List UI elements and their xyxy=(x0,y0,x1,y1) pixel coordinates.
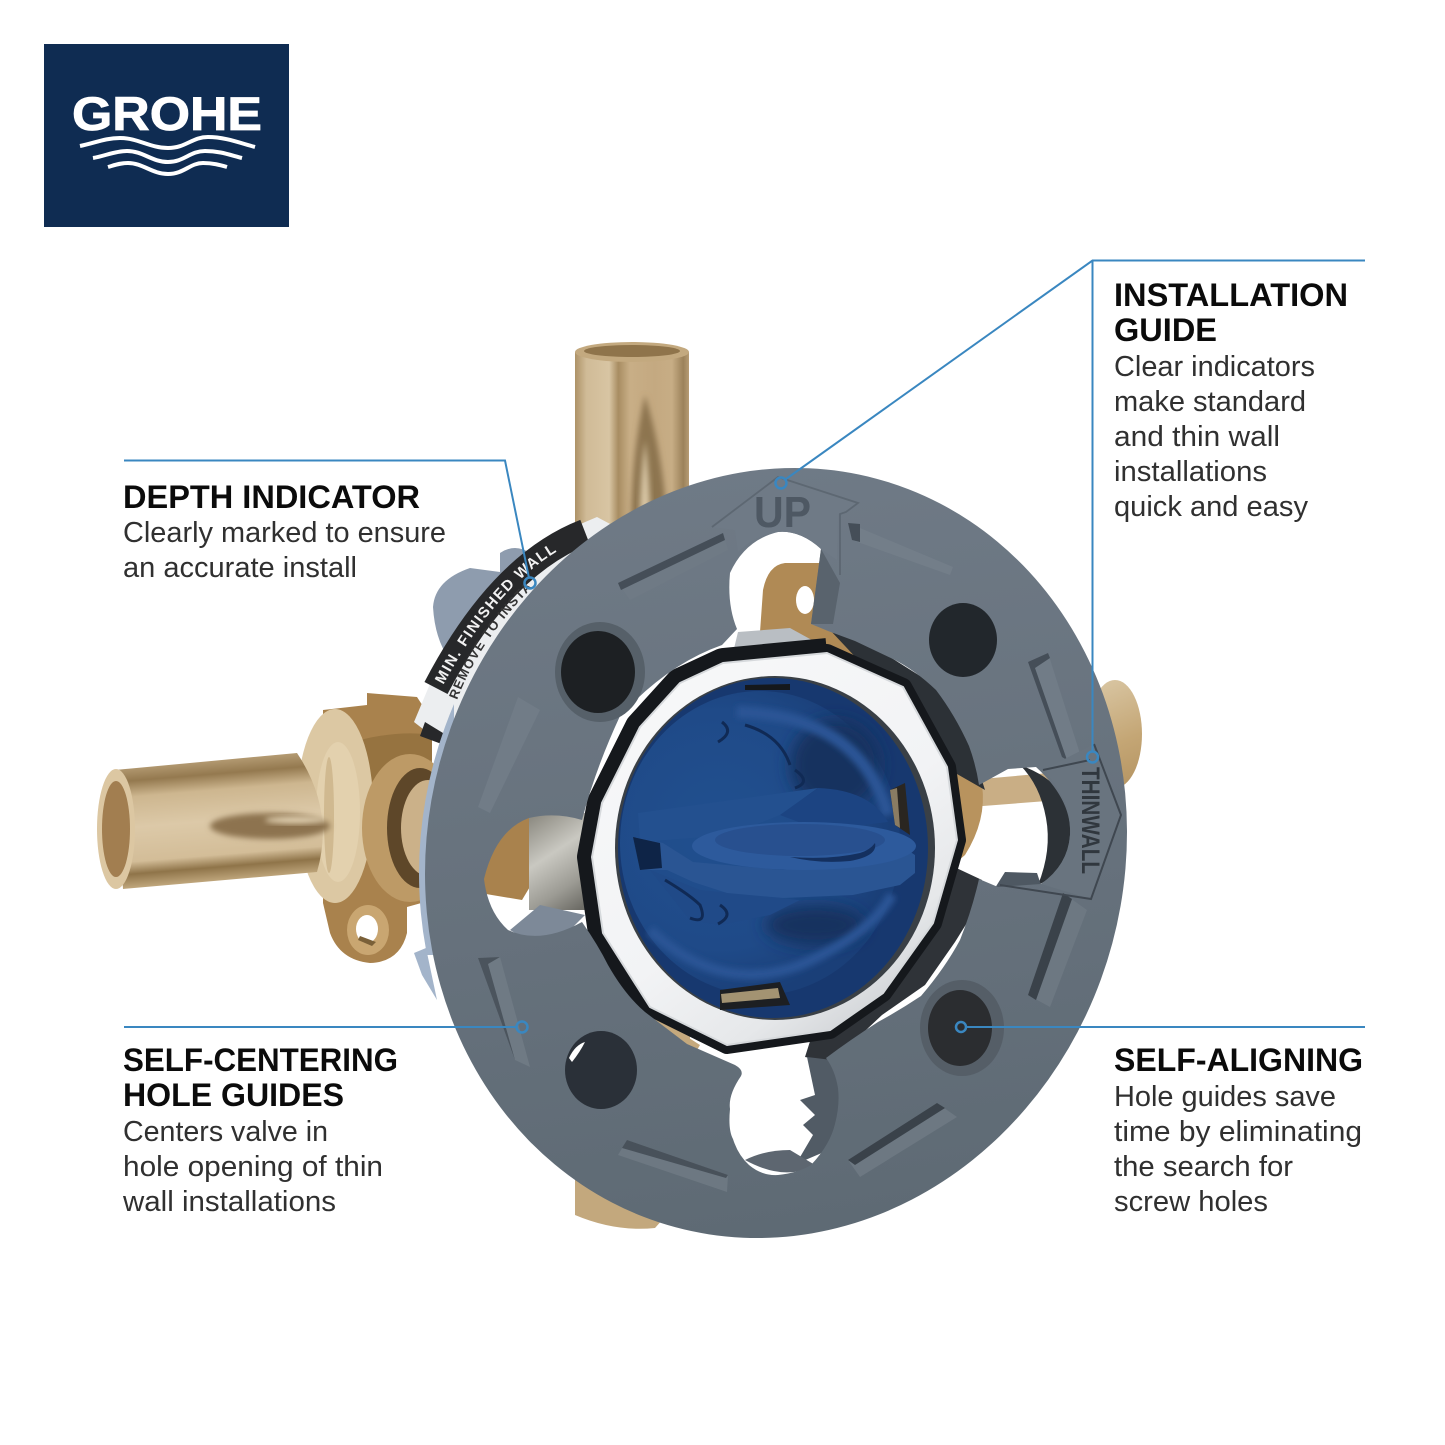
handle stem xyxy=(638,788,818,842)
dark wall upper right xyxy=(830,630,985,790)
text block: installation guide: Clear indicators xyxy=(1114,351,1315,383)
text block: self-aligning: SELF-ALIGNING xyxy=(1114,1042,1363,1078)
text block: self-centering hole guides: HOLE GUIDES xyxy=(123,1077,344,1113)
raised arc bars xyxy=(478,523,1087,1192)
text block: installation guide: GUIDE xyxy=(1114,312,1217,348)
text block: installation guide xyxy=(1114,277,1348,523)
text block: self-aligning: screw holes xyxy=(1114,1186,1268,1218)
hex nut xyxy=(362,754,458,902)
chrome ring xyxy=(592,653,957,1045)
top brass pipe xyxy=(575,342,689,572)
brass behind left hole xyxy=(472,810,540,900)
text block: self-centering hole guides: wall installations xyxy=(122,1186,336,1218)
text block: depth indicator: Clearly marked to ensure xyxy=(123,517,446,549)
dark gasket behind chrome xyxy=(592,653,957,1045)
left brass pipe and body xyxy=(97,693,458,963)
logo: GROHE: GROHE xyxy=(72,87,262,140)
text block: installation guide: quick and easy xyxy=(1114,491,1308,523)
dark gasket upper left xyxy=(592,653,827,1007)
brass valve body xyxy=(323,693,432,963)
callout line: self-aligning xyxy=(956,1022,1365,1032)
blue handle ring xyxy=(633,837,915,898)
text block: self-aligning: Hole guides save xyxy=(1114,1081,1336,1113)
text block: depth indicator xyxy=(123,479,446,584)
text block: self-centering hole guides: hole opening of thin xyxy=(123,1151,383,1183)
silver collar xyxy=(730,628,830,665)
brass ring right xyxy=(945,765,983,872)
text block: self-centering hole guides: Centers valve in xyxy=(123,1116,328,1148)
text block: installation guide: installations xyxy=(1114,456,1267,488)
dark wall lower right xyxy=(805,865,982,1062)
text block: self-aligning: the search for xyxy=(1114,1151,1293,1183)
grey mounting plate xyxy=(425,468,1127,1238)
dark wall bottom hole xyxy=(745,1150,815,1172)
text block: self-centering hole guides xyxy=(122,1042,398,1218)
embossed dots xyxy=(665,722,804,924)
callout line: depth indicator xyxy=(124,460,536,588)
callout line: self-centering xyxy=(124,1022,528,1032)
callout lines: installation guide xyxy=(776,260,1365,762)
depth label strip xyxy=(414,517,610,744)
dark wall right cut-out xyxy=(1020,765,1074,885)
blue-grey clip xyxy=(510,905,585,945)
bottom brass pipe xyxy=(575,1030,690,1229)
brass rear lug xyxy=(760,563,905,690)
plate flap beside top cut-out xyxy=(811,549,840,624)
UP arrow marking xyxy=(712,477,858,575)
text block: self-centering hole guides: SELF-CENTERING xyxy=(123,1042,398,1078)
text block: installation guide: and thin wall xyxy=(1114,421,1280,453)
plate side rim xyxy=(419,704,454,955)
logo: GROHE xyxy=(44,44,289,227)
brass under lower left xyxy=(630,1000,700,1062)
blue cap xyxy=(615,676,935,1020)
mounting lug hole xyxy=(347,905,389,955)
text block: self-aligning: time by eliminating xyxy=(1114,1116,1362,1148)
THINWALL arrow marking xyxy=(1000,744,1121,899)
THINWALL arrow marking: THINWALL xyxy=(1076,767,1104,874)
depth label strip: REMOVE TO INSTALL xyxy=(449,584,531,700)
text block: installation guide: INSTALLATION xyxy=(1114,277,1348,313)
brass horizontal pipe xyxy=(970,772,1060,807)
slots xyxy=(745,684,790,690)
text block: depth indicator: an accurate install xyxy=(123,552,357,584)
grey rear knob xyxy=(433,548,545,660)
steel cylinder xyxy=(529,813,585,910)
side tab xyxy=(414,948,437,1000)
tab right cut-out xyxy=(995,872,1042,888)
pipe tube xyxy=(115,753,323,889)
valve product illustration xyxy=(97,284,1142,1238)
text block: installation guide: make standard xyxy=(1114,386,1306,418)
teeth bottom cut-out xyxy=(796,1057,845,1164)
right brass pipe end xyxy=(1088,680,1142,788)
depth label strip: MIN. FINISHED WALL xyxy=(434,546,556,684)
internals seen through cut-outs xyxy=(472,563,1074,1172)
UP arrow marking: UP xyxy=(754,488,811,537)
flange xyxy=(297,709,373,903)
text block: depth indicator: DEPTH INDICATOR xyxy=(123,479,420,515)
text block: self-aligning xyxy=(1114,1042,1363,1218)
screw holes xyxy=(555,603,1004,1109)
